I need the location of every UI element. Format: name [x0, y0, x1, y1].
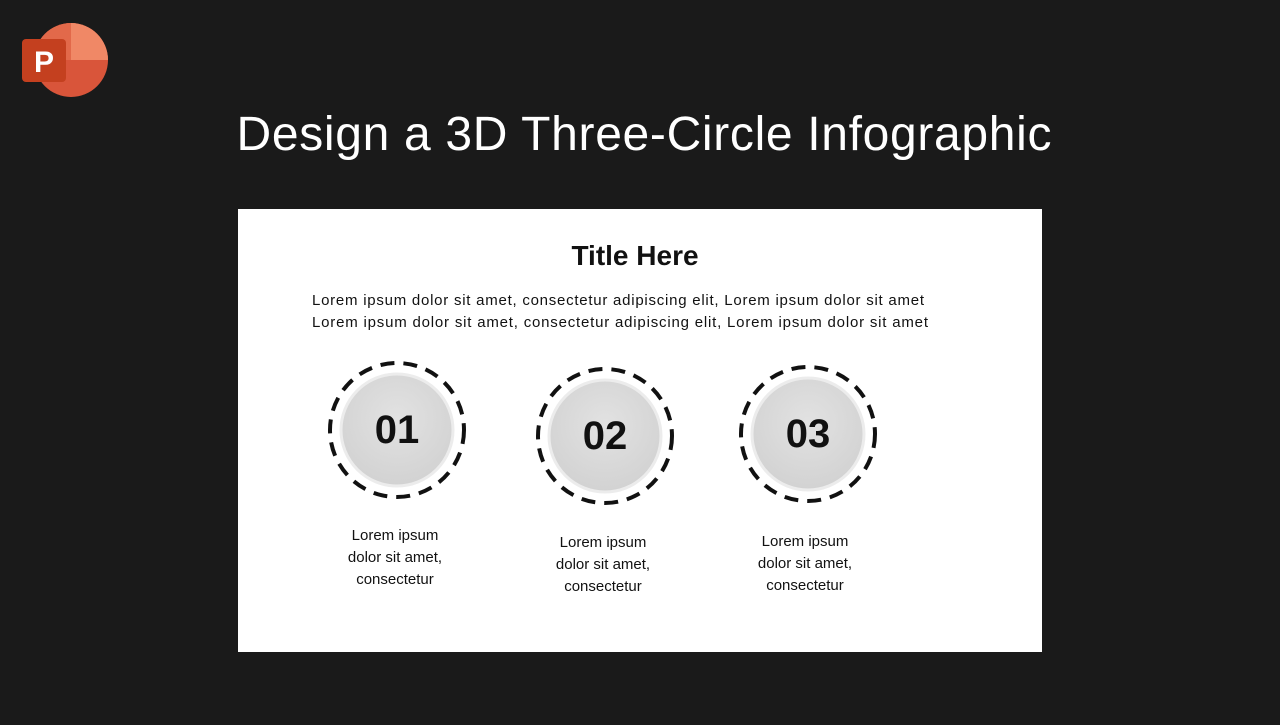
circle 03: 03 — [786, 412, 830, 456]
title: Design a 3D Three-Circle Infographic — [236, 108, 1052, 161]
text block: description: Lorem ipsum dolor sit amet, consectetur adipiscing elit, Lorem ipsum dolor sit amet — [312, 314, 929, 331]
text block: description: Lorem ipsum dolor sit amet, consectetur adipiscing elit, Lorem ipsum dolor sit amet — [312, 292, 925, 309]
caption 03 — [758, 533, 852, 594]
slide heading: Title Here — [571, 240, 699, 271]
caption 03: consectetur — [766, 577, 844, 594]
panel: slide — [238, 209, 1042, 652]
caption 02 — [556, 534, 650, 595]
circle 02 — [538, 369, 672, 503]
caption 01: dolor sit amet, — [348, 549, 442, 566]
caption 02: Lorem ipsum — [560, 534, 646, 551]
caption 01: consectetur — [356, 571, 434, 588]
circle 03 — [741, 367, 875, 501]
caption 02: consectetur — [564, 578, 642, 595]
caption 03: Lorem ipsum — [762, 533, 848, 550]
caption 02: dolor sit amet, — [556, 556, 650, 573]
circle 01 — [330, 363, 464, 497]
circle 01: 01 — [375, 408, 419, 452]
caption 01 — [348, 527, 442, 588]
text block: description — [312, 292, 929, 331]
caption 01: Lorem ipsum — [352, 527, 438, 544]
caption 03: dolor sit amet, — [758, 555, 852, 572]
icon: powerpoint logo — [22, 23, 108, 97]
circle 02: 02 — [583, 414, 627, 458]
icon: powerpoint logo: P — [34, 46, 54, 79]
